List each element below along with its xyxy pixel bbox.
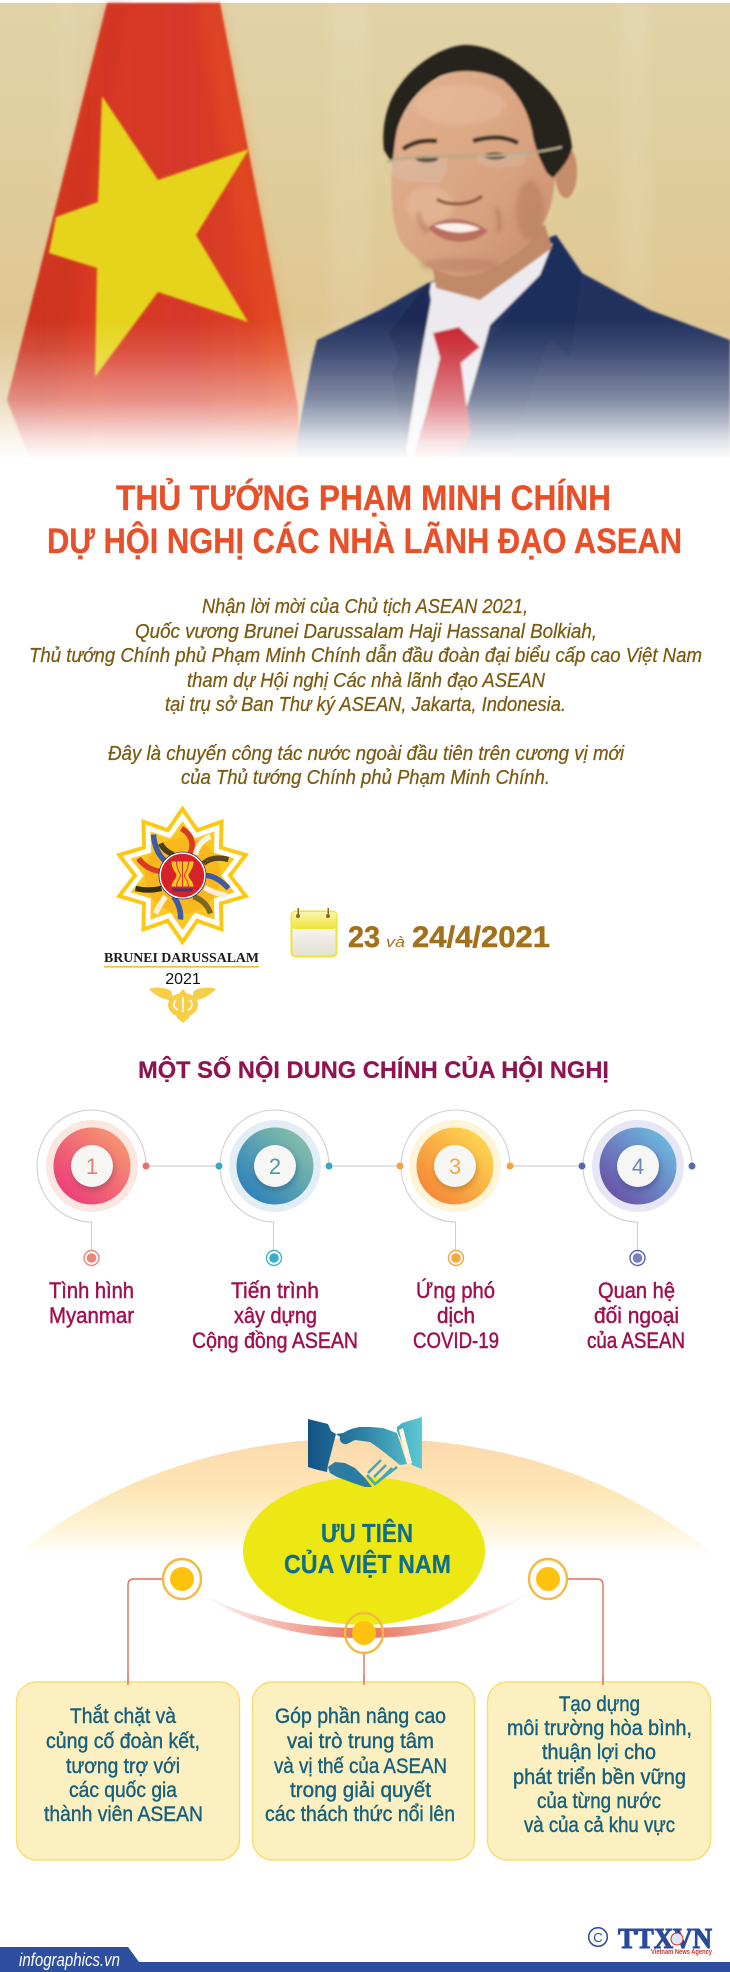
red tie bbox=[412, 327, 480, 460]
date: 24/4/2021 bbox=[412, 921, 550, 954]
intro text: Đây là chuyến công tác nước ngoài đầu tiên trên cương vị mới bbox=[108, 743, 625, 765]
intro text: của Thủ tướng Chính phủ Phạm Minh Chính. bbox=[181, 767, 550, 789]
neck bbox=[430, 225, 552, 300]
label bbox=[49, 1278, 134, 1328]
intro text: tham dự Hội nghị Các nhà lãnh đạo ASEAN bbox=[187, 670, 546, 692]
logo: TTXVN: C bbox=[593, 1930, 603, 1945]
priority 2 text: trong giải quyết bbox=[290, 1778, 431, 1802]
icon: ASEAN Brunei 2021 logo bbox=[104, 806, 259, 1023]
priority 3 text: môi trường hòa bình, bbox=[507, 1716, 692, 1740]
date: và bbox=[386, 934, 405, 951]
label bbox=[413, 1278, 499, 1353]
eyes bbox=[416, 156, 438, 162]
icon: ASEAN Brunei 2021 logo: 2021 bbox=[165, 971, 201, 988]
priority 1 text: tương trợ với bbox=[66, 1754, 180, 1778]
flag bbox=[7, 3, 300, 460]
intro text: Thủ tướng Chính phủ Phạm Minh Chính dẫn đầu đoàn đại biểu cấp cao Việt Nam bbox=[29, 644, 702, 667]
label: Ứng phó bbox=[416, 1278, 495, 1303]
panel: priority 2 bbox=[252, 1675, 474, 1860]
logo ornament bbox=[149, 988, 216, 1023]
priority 3 text: phát triển bền vững bbox=[513, 1765, 686, 1789]
label: của ASEAN bbox=[587, 1328, 685, 1353]
label bbox=[192, 1278, 358, 1353]
priority 3 text: thuận lợi cho bbox=[542, 1740, 656, 1764]
node: left bbox=[163, 1559, 201, 1599]
panel: topic 1 Myanmar bbox=[37, 1110, 150, 1328]
title: THỦ TƯỚNG PHẠM MINH CHÍNH bbox=[116, 478, 611, 518]
panel: hero photo bbox=[0, 3, 730, 472]
label: COVID-19 bbox=[413, 1328, 499, 1353]
panel: topic 3 COVID-19 bbox=[396, 1110, 514, 1353]
panel: priority 1 bbox=[16, 1675, 240, 1860]
number 1: 1 bbox=[86, 1154, 98, 1179]
crescent arc bbox=[198, 1591, 532, 1638]
footer band bbox=[0, 1947, 730, 1972]
priority 2 text: vai trò trung tâm bbox=[287, 1729, 434, 1753]
label: Cộng đồng ASEAN bbox=[192, 1328, 358, 1353]
priority 1 text: thành viên ASEAN bbox=[44, 1802, 203, 1826]
priority 2 text: các thách thức nổi lên bbox=[265, 1802, 455, 1826]
connector: right priority bbox=[567, 1579, 603, 1685]
nose bbox=[437, 196, 482, 204]
number 3: 3 bbox=[449, 1154, 461, 1179]
intro text bbox=[29, 596, 702, 789]
glasses bbox=[387, 147, 562, 162]
face bbox=[391, 71, 556, 276]
label: xây dựng bbox=[234, 1303, 317, 1328]
priority 1 text: Thắt chặt và bbox=[70, 1703, 176, 1728]
ear bbox=[555, 146, 577, 198]
icon: handshake bbox=[308, 1417, 422, 1487]
panel: Vietnam priorities dome bbox=[15, 1438, 716, 1556]
priority 3 text: của từng nước bbox=[537, 1789, 661, 1813]
connector lines bbox=[146, 1165, 582, 1167]
priority 2 text: Góp phần nâng cao bbox=[275, 1704, 446, 1728]
flag star bbox=[49, 96, 249, 377]
title bbox=[47, 478, 682, 561]
priority 2 text: và vị thế của ASEAN bbox=[274, 1754, 447, 1778]
face shading bbox=[406, 85, 544, 272]
heading: main contents: MỘT SỐ NỘI DUNG CHÍNH CỦA HỘI NGHỊ bbox=[138, 1055, 609, 1084]
date: 23 bbox=[348, 921, 380, 954]
node: right bbox=[529, 1559, 567, 1599]
priority 1 text: củng cố đoàn kết, bbox=[46, 1729, 200, 1753]
intro text: tại trụ sở Ban Thư ký ASEAN, Jakarta, Indonesia. bbox=[165, 694, 566, 716]
number 4: 4 bbox=[632, 1154, 644, 1179]
logo: TTXVN: TTXVN bbox=[618, 1924, 712, 1955]
intro text: Quốc vương Brunei Darussalam Haji Hassanal Bolkiah, bbox=[135, 621, 597, 643]
logo caption: BRUNEI DARUSSALAM bbox=[104, 950, 259, 965]
portrait of the prime minister bbox=[296, 45, 730, 460]
priority 3 text: và của cả khu vực bbox=[524, 1813, 675, 1837]
label: Tiến trình bbox=[231, 1278, 319, 1303]
label: dịch bbox=[437, 1303, 475, 1328]
priority 3 text bbox=[507, 1692, 692, 1837]
central yellow ellipse bbox=[243, 1477, 485, 1625]
intro text: Nhận lời mời của Chủ tịch ASEAN 2021, bbox=[202, 596, 528, 618]
date bbox=[348, 921, 550, 954]
priorities heading bbox=[284, 1518, 451, 1579]
hair bbox=[383, 45, 572, 178]
icon: calendar bbox=[292, 908, 336, 956]
label: đối ngoại bbox=[594, 1303, 679, 1328]
panel: topic 4 external relations bbox=[578, 1110, 696, 1353]
footer source text: infographics.vn bbox=[19, 1950, 120, 1970]
priority 1 text bbox=[44, 1703, 203, 1826]
node: middle bbox=[345, 1613, 383, 1653]
priority 1 text: các quốc gia bbox=[69, 1778, 177, 1802]
mouth bbox=[428, 219, 488, 242]
eyebrows bbox=[403, 141, 437, 149]
label bbox=[587, 1278, 685, 1353]
priorities heading: CỦA VIỆT NAM bbox=[284, 1548, 451, 1579]
label: Myanmar bbox=[49, 1303, 134, 1328]
panel: topic 2 ASEAN community bbox=[192, 1110, 358, 1353]
connector: middle priority bbox=[363, 1653, 365, 1685]
label: Tình hình bbox=[49, 1278, 134, 1303]
priority 3 text: Tạo dựng bbox=[559, 1692, 640, 1716]
logo: TTXVN: Vietnam News Agency bbox=[651, 1949, 712, 1956]
number 2: 2 bbox=[269, 1154, 281, 1179]
priority 2 text bbox=[265, 1704, 455, 1826]
connector: left priority bbox=[128, 1579, 163, 1685]
priorities heading: ƯU TIÊN bbox=[321, 1518, 413, 1548]
panel: priority 3 bbox=[488, 1675, 710, 1860]
photo fade to white bbox=[0, 320, 730, 460]
label: Quan hệ bbox=[598, 1278, 675, 1303]
